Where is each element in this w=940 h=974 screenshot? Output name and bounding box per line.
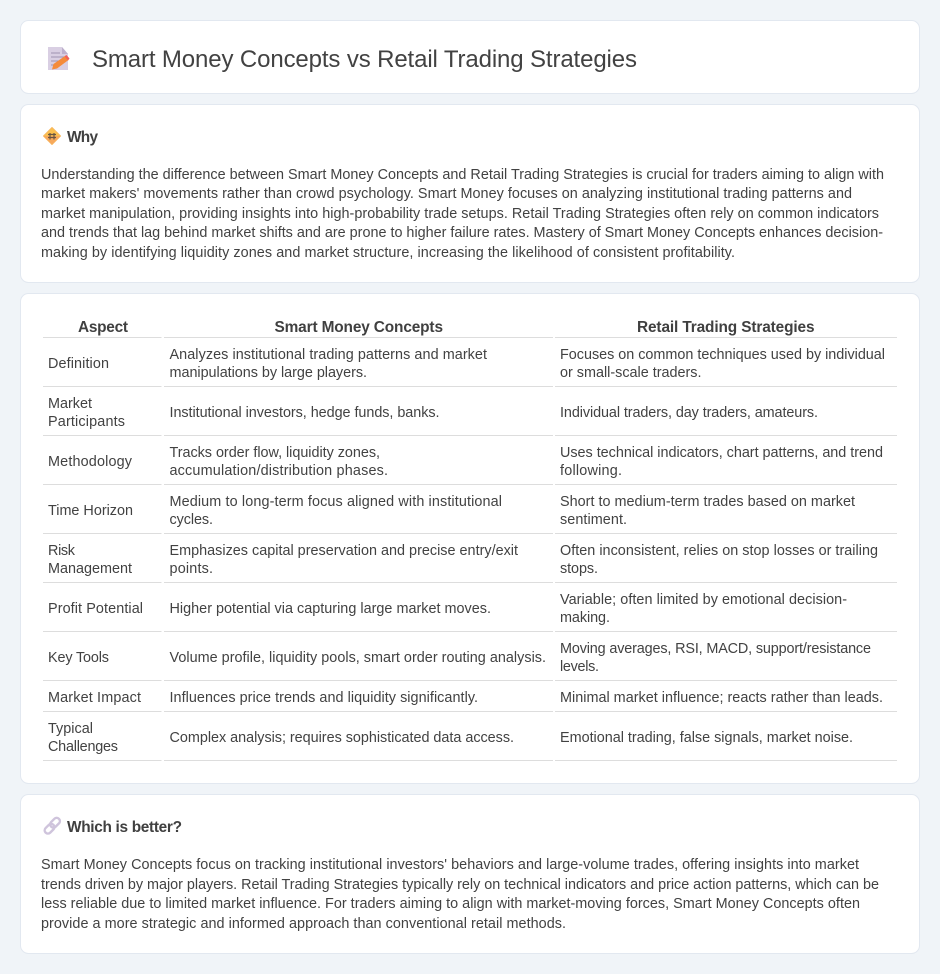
- row: key tools: [43, 641, 897, 681]
- table header: Retail Trading Strategies: [637, 319, 814, 336]
- text block: which is better paragraph: [41, 857, 879, 932]
- row: typical challenges: Emotional trading, false signals, market noise.: [560, 730, 853, 746]
- row: market impact: [43, 690, 897, 712]
- row: definition: manipulations by large players.: [170, 365, 367, 381]
- row: time horizon: Short to medium-term trades based on market: [560, 494, 855, 510]
- row: time horizon: [43, 494, 897, 534]
- row: key tools: levels.: [560, 659, 599, 675]
- table header: Smart Money Concepts: [274, 319, 443, 336]
- text block: why paragraph: and trends that lag behind market shifts and are prone to higher failure rates. Mastery of Smart Money Concepts enhances decision-: [41, 225, 883, 241]
- panel: which is better: [20, 794, 920, 954]
- row: typical challenges: Complex analysis; requires sophisticated data access.: [170, 730, 514, 746]
- row: key tools: Volume profile, liquidity pools, smart order routing analysis.: [170, 650, 546, 666]
- text block: why paragraph: making by identifying liquidity zones and market structure, increasing the likelihood of consistent profitability.: [41, 245, 735, 261]
- row: typical challenges: Challenges: [48, 739, 118, 755]
- title: Smart Money Concepts vs Retail Trading Strategies: [92, 46, 637, 73]
- row: definition: Focuses on common techniques used by individual: [560, 347, 885, 363]
- row: market impact: Minimal market influence; reacts rather than leads.: [560, 690, 883, 706]
- row: market participants: [43, 396, 897, 436]
- icon: link: [43, 817, 61, 835]
- row: risk management: Often inconsistent, relies on stop losses or trailing: [560, 543, 878, 559]
- row: time horizon: sentiment.: [560, 512, 627, 528]
- row: definition: [43, 347, 897, 387]
- row: key tools: Moving averages, RSI, MACD, support/resistance: [560, 641, 871, 657]
- row: methodology: Tracks order flow, liquidity zones,: [170, 445, 380, 461]
- row: time horizon: Time Horizon: [48, 503, 133, 519]
- heading: why: Why: [67, 129, 98, 146]
- row: definition: or small-scale traders.: [560, 365, 702, 381]
- row: typical challenges: Typical: [48, 721, 93, 737]
- row: risk management: Management: [48, 561, 132, 577]
- text block: why paragraph: Understanding the difference between Smart Money Concepts and Retail Trading Strategies is crucial for traders aiming to align with: [41, 167, 884, 183]
- row: time horizon: cycles.: [170, 512, 213, 528]
- row: market participants: Individual traders, day traders, amateurs.: [560, 405, 818, 421]
- icon: diamond sign: [44, 128, 60, 144]
- row: methodology: Uses technical indicators, chart patterns, and trend: [560, 445, 883, 461]
- row: risk management: stops.: [560, 561, 598, 577]
- heading: which is better: Which is better?: [67, 819, 182, 836]
- panel: comparison table: [20, 294, 920, 784]
- row: market impact: Influences price trends and liquidity significantly.: [170, 690, 478, 706]
- row: profit potential: Higher potential via capturing large market moves.: [170, 601, 491, 617]
- row: risk management: Emphasizes capital preservation and precise entry/exit: [170, 543, 518, 559]
- row: typical challenges: [43, 721, 897, 761]
- row: risk management: points.: [170, 561, 213, 577]
- text block: which is better paragraph: trends driven by major players. Retail Trading Strategies typically rely on technical indicators and price action patterns, which can be: [41, 877, 879, 893]
- row: profit potential: Variable; often limited by emotional decision-: [560, 592, 847, 608]
- row: market participants: Institutional investors, hedge funds, banks.: [170, 405, 440, 421]
- row: methodology: [43, 445, 897, 485]
- row: methodology: following.: [560, 463, 622, 479]
- row: definition: Analyzes institutional trading patterns and market: [170, 347, 487, 363]
- row: time horizon: Medium to long-term focus aligned with institutional: [170, 494, 502, 510]
- text block: which is better paragraph: less reliable due to limited market influence. For traders aiming to align with market-moving forces, Smart Money Concepts often: [41, 896, 860, 912]
- row: risk management: [43, 543, 897, 583]
- row: key tools: Key Tools: [48, 650, 109, 666]
- table header: [43, 319, 897, 338]
- row: profit potential: [43, 592, 897, 632]
- row: methodology: Methodology: [48, 454, 133, 470]
- text block: why paragraph: market makers' movements rather than crowd psychology. Smart Money focuses on analyzing institutional trading patterns and: [41, 186, 852, 202]
- panel: title header: [20, 20, 920, 94]
- row: profit potential: making.: [560, 610, 610, 626]
- row: market participants: Market: [48, 396, 92, 412]
- table header: Aspect: [78, 319, 128, 336]
- row: definition: Definition: [48, 356, 109, 372]
- icon: document with pencil: [48, 47, 70, 70]
- text block: why paragraph: [41, 167, 884, 261]
- panel: why: [20, 104, 920, 282]
- row: market participants: Participants: [48, 414, 125, 430]
- row: profit potential: Profit Potential: [48, 601, 143, 617]
- row: risk management: Risk: [48, 543, 76, 559]
- text block: which is better paragraph: provide a more strategic and informed approach than conventional retail methods.: [41, 916, 566, 932]
- row: market impact: Market Impact: [48, 690, 141, 706]
- text block: why paragraph: market manipulation, providing insights into high-probability trade setups. Retail Trading Strategies often rely on common indicators: [41, 206, 879, 222]
- text block: which is better paragraph: Smart Money Concepts focus on tracking institutional investors' behaviors and large-volume trades, offering insights into market: [41, 857, 859, 873]
- row: methodology: accumulation/distribution phases.: [170, 463, 388, 479]
